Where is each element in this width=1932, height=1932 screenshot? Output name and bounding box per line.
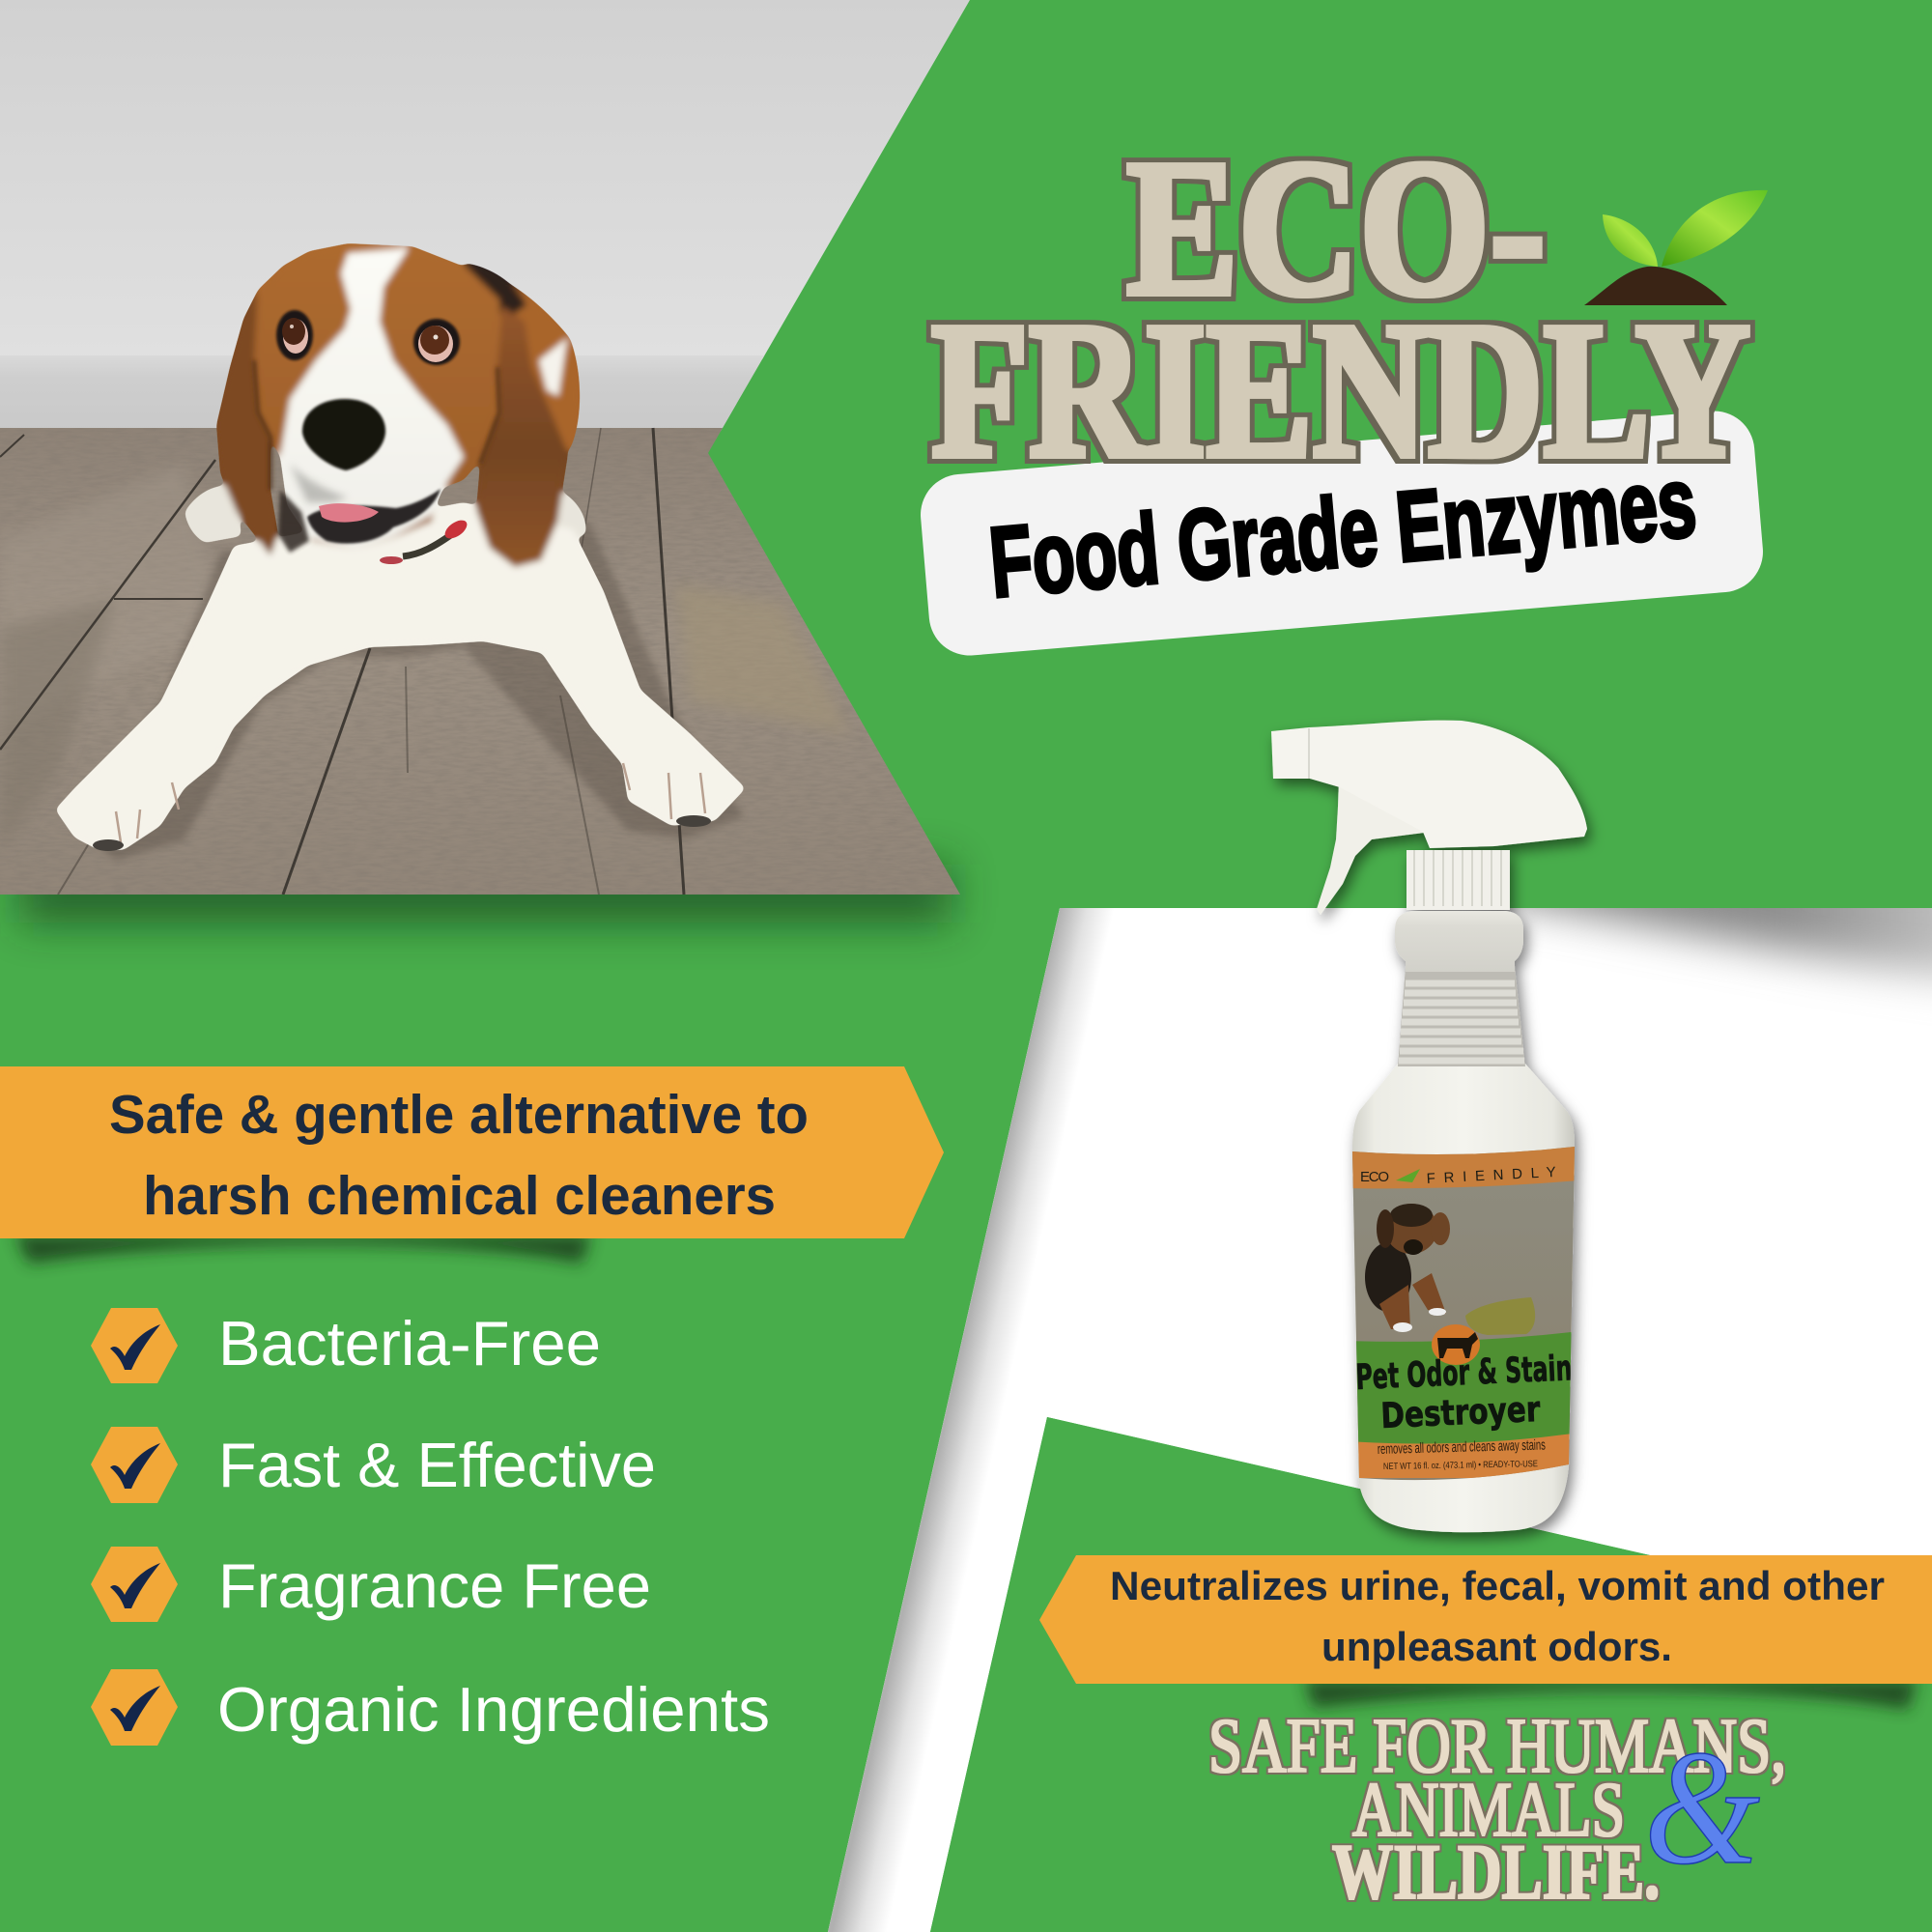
shadow: right banner [1304,1680,1918,1710]
label sprout [1396,1169,1420,1182]
panel: lower right green [930,1417,1932,1932]
label: Bacteria-Free [218,1308,601,1378]
label text: eco friendly [1360,1164,1556,1187]
nozzle seam [1308,728,1310,779]
dog: white blaze and muzzle [280,248,464,549]
shadow: left banner [14,1235,591,1264]
list item: Fast & Effective [91,1427,656,1503]
collar [1395,911,1523,972]
spray head and nozzle [1271,721,1587,848]
dog: nose [302,399,385,470]
label title: Pet Odor & Stain [1355,1349,1573,1398]
dog: body and front legs [55,502,746,850]
label text: eco friendly: ECO [1360,1169,1389,1185]
label top band [1348,1140,1579,1188]
ampersand: & [1644,1717,1760,1898]
list item: Organic Ingredients [91,1669,770,1746]
label: Fast & Effective [218,1430,656,1500]
dog: right ear [476,306,568,567]
line: safe for humans: SAFE FOR HUMANS, [1208,1704,1786,1789]
icon: sprout in soil [1584,190,1768,305]
label text: eco friendly: FRIENDLY [1426,1164,1556,1187]
dog: right eye [413,319,460,365]
list item: Fragrance Free [91,1547,651,1622]
dog: fur shapes [55,243,746,850]
label puppy [1365,1204,1450,1332]
dog: ear seams [254,360,499,490]
heading: ECO-FRIENDLY [931,119,1750,498]
dog: tongue [319,503,379,523]
product: spray bottle [1271,721,1587,1532]
label emblem [1432,1324,1480,1365]
dog: left eye [276,310,313,360]
dog: back paws [185,485,242,543]
dog: dark saddle [464,263,526,319]
dog: shoulder white patch [539,338,567,396]
dog: claws [93,815,711,851]
dog: collar [380,517,470,564]
dog: dark jowl [278,490,309,553]
line: wildlife: WILDLIFE. [1332,1828,1660,1916]
dog: left ear [216,290,278,555]
dog: mouth [307,489,440,544]
wood floor [0,428,976,895]
label tagline: removes all odors and cleans away stains [1378,1436,1546,1458]
label: Fragrance Free [218,1550,651,1621]
label bottom band [1348,1433,1579,1478]
trigger [1317,778,1439,915]
label: Organic Ingredients [217,1674,770,1745]
bottle body [1352,1063,1575,1532]
heading line: FRIENDLY: FRIENDLY [931,281,1750,498]
banner text line 2: harsh chemical cleaners [143,1165,776,1227]
panel: beagle dog photo [0,0,976,895]
dog shadow on floor [77,522,744,860]
photo drop shadow on green [19,865,952,923]
dog: muzzle speckle [290,464,348,502]
banner text line 1: Safe & gentle alternative to [109,1084,809,1146]
banner text line 2: unpleasant odors. [1321,1624,1672,1669]
panel: white diagonal area [828,908,1932,1932]
banner text line 1: Neutralizes urine, fecal, vomit and other [1110,1563,1885,1608]
dog: back body [502,278,580,456]
label sponge [1465,1297,1535,1335]
skirting board [0,355,765,431]
line: animals: ANIMALS [1352,1768,1625,1853]
dog: toes [116,763,705,842]
white area shadows [828,865,1932,1932]
banner: safe and gentle alternative [0,1066,944,1238]
heading line: ECO-: ECO- [1126,119,1546,336]
ribbed cap [1406,850,1510,910]
badge: Food Grade Enzymes [918,408,1766,659]
bottle label [1348,1140,1579,1488]
list item: Bacteria-Free [91,1308,601,1383]
safe lines [1208,1704,1786,1916]
neck ribs [1398,966,1525,1066]
text block: safe for humans, animals and wildlife [1208,1704,1786,1916]
label subtitle: Destroyer [1380,1390,1541,1436]
label net weight: NET WT 16 fl. oz. (473.1 ml) • READY-TO-USE [1383,1459,1538,1472]
label green band [1348,1331,1579,1445]
wall [0,0,976,359]
banner: neutralizes odors [1039,1555,1932,1684]
dog: head brown [254,243,502,549]
